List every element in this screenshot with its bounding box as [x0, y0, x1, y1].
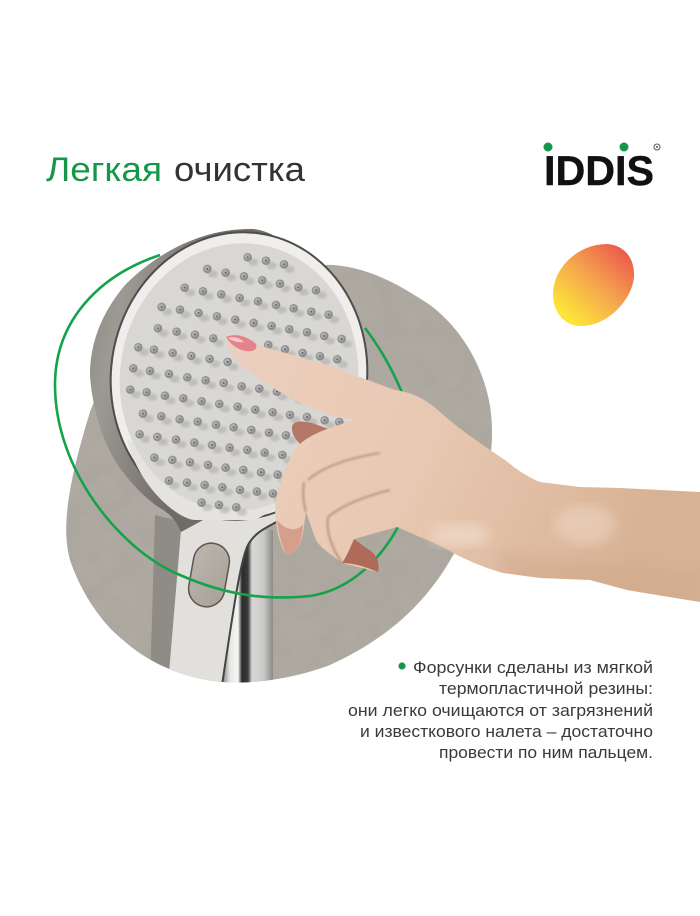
title: [46, 151, 305, 189]
logo: IDDIS: IDDIS: [544, 147, 654, 194]
arm shading: [500, 556, 698, 602]
text block: description: и известкового налета – достаточно: [360, 723, 653, 741]
photo: shower head and hand: [55, 214, 700, 690]
thumb nail: [292, 421, 334, 444]
shower handle: [150, 514, 276, 682]
nozzles: [126, 253, 352, 516]
green ring: [55, 255, 415, 598]
skin highlights: [555, 505, 615, 545]
text block: description: они легко очищаются от загрязнений: [348, 702, 653, 720]
title: очистка: [174, 151, 305, 189]
hand: [226, 335, 700, 620]
shower head: [90, 214, 387, 538]
bullet: [398, 662, 406, 670]
hand silhouette: [227, 337, 700, 602]
text block: description: провести по ним пальцем.: [439, 744, 653, 762]
middle finger tip: [277, 520, 303, 555]
index finger nail: [226, 335, 256, 351]
stone background blob: [66, 264, 492, 682]
text block: description: термопластичной резины:: [439, 680, 653, 698]
text block: description: Форсунки сделаны из мягкой: [413, 659, 653, 677]
title: Легкая: [46, 151, 162, 189]
curled finger nail: [342, 539, 379, 572]
finger creases: [303, 453, 390, 563]
text block: description: [348, 659, 653, 762]
slider button: [188, 542, 230, 608]
icon: gradient sun blob: [553, 244, 634, 326]
